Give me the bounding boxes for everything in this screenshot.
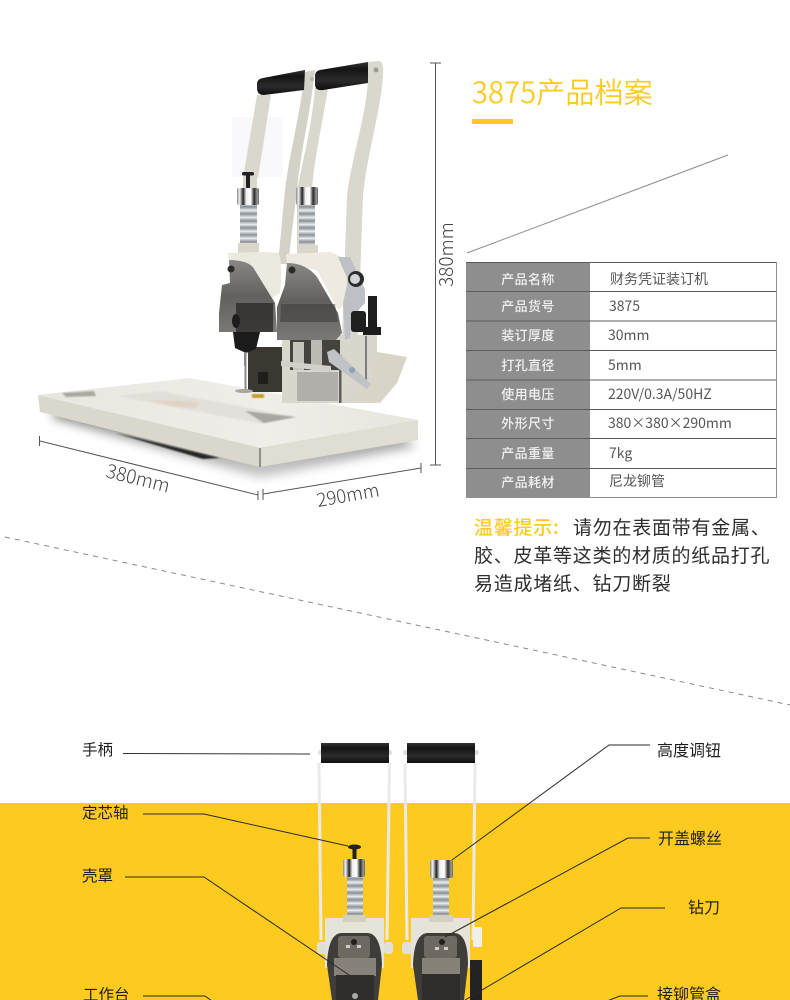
callout: centering shaft — [82, 801, 348, 846]
table labels column: 产品货号 — [501, 296, 555, 315]
table values column — [608, 269, 732, 491]
dimension: length 380mm: 380mm — [104, 457, 173, 499]
yellow background band — [0, 803, 790, 1000]
callout: cover screw — [445, 825, 722, 937]
warm tip note: 请勿在表面带有金属、 — [573, 513, 771, 540]
dimension: height 380mm — [430, 63, 459, 465]
dashed divider — [5, 537, 790, 705]
table values column: 380×380×290mm — [608, 413, 732, 433]
warm tip note: 胶、皮革等这类的材质的纸品打孔 — [474, 541, 770, 568]
table labels column: 装订厚度 — [501, 325, 555, 344]
warm tip note: 易造成堵纸、钻刀断裂 — [474, 569, 672, 596]
left head — [246, 174, 250, 189]
spec table — [466, 262, 777, 498]
title: 3875产品档案 — [472, 70, 653, 112]
warm tip note: 温馨提示: — [474, 513, 559, 540]
callout: worktable — [83, 983, 212, 1000]
pressure lever — [327, 349, 371, 389]
dimension: width 290mm: 290mm — [315, 476, 381, 513]
front view machine right — [402, 743, 482, 1000]
table values column: 30mm — [608, 325, 649, 345]
front view machine left — [317, 743, 393, 1000]
product photo: binding machine — [38, 61, 418, 478]
callout: shell cover: 壳罩 — [82, 864, 113, 886]
table values column: 5mm — [608, 355, 642, 375]
table labels column — [501, 269, 555, 491]
callout: centering shaft: 定芯轴 — [82, 801, 129, 823]
callout: handle: 手柄 — [82, 738, 113, 760]
table values column: 财务凭证装订机 — [610, 269, 708, 289]
callout: drill blade: 钻刀 — [688, 894, 720, 918]
diagonal rule — [467, 155, 728, 253]
dimension: height 380mm: 380mm — [432, 222, 459, 287]
rear arms — [243, 95, 271, 178]
right head and column — [282, 335, 377, 403]
table labels column: 产品名称 — [501, 269, 555, 288]
callout: height adjust knob: 高度调钮 — [657, 737, 721, 761]
table values column: 7kg — [609, 443, 632, 463]
callout: height adjust knob — [452, 737, 721, 860]
table labels column: 产品重量 — [501, 443, 555, 462]
warm tip note — [474, 513, 771, 596]
table values column: 3875 — [609, 296, 640, 316]
dimension: length 380mm — [40, 436, 258, 500]
table values column: 220V/0.3A/50HZ — [608, 384, 712, 404]
collection tray — [347, 352, 407, 403]
table labels column: 打孔直径 — [501, 355, 555, 374]
rear column block — [248, 347, 283, 392]
table labels column: 产品耗材 — [501, 472, 555, 491]
dimension: width 290mm — [263, 463, 421, 513]
callout: rivet tube box — [607, 981, 721, 1000]
callout: cover screw: 开盖螺丝 — [658, 825, 722, 849]
callout: shell cover — [82, 864, 352, 977]
table values column: 尼龙铆管 — [609, 471, 665, 491]
table labels column: 使用电压 — [501, 384, 555, 403]
front arms — [297, 88, 328, 250]
callout: drill blade — [465, 894, 720, 1000]
side latch plate — [338, 257, 365, 340]
table labels column: 外形尺寸 — [501, 413, 555, 432]
title underline — [472, 119, 513, 124]
